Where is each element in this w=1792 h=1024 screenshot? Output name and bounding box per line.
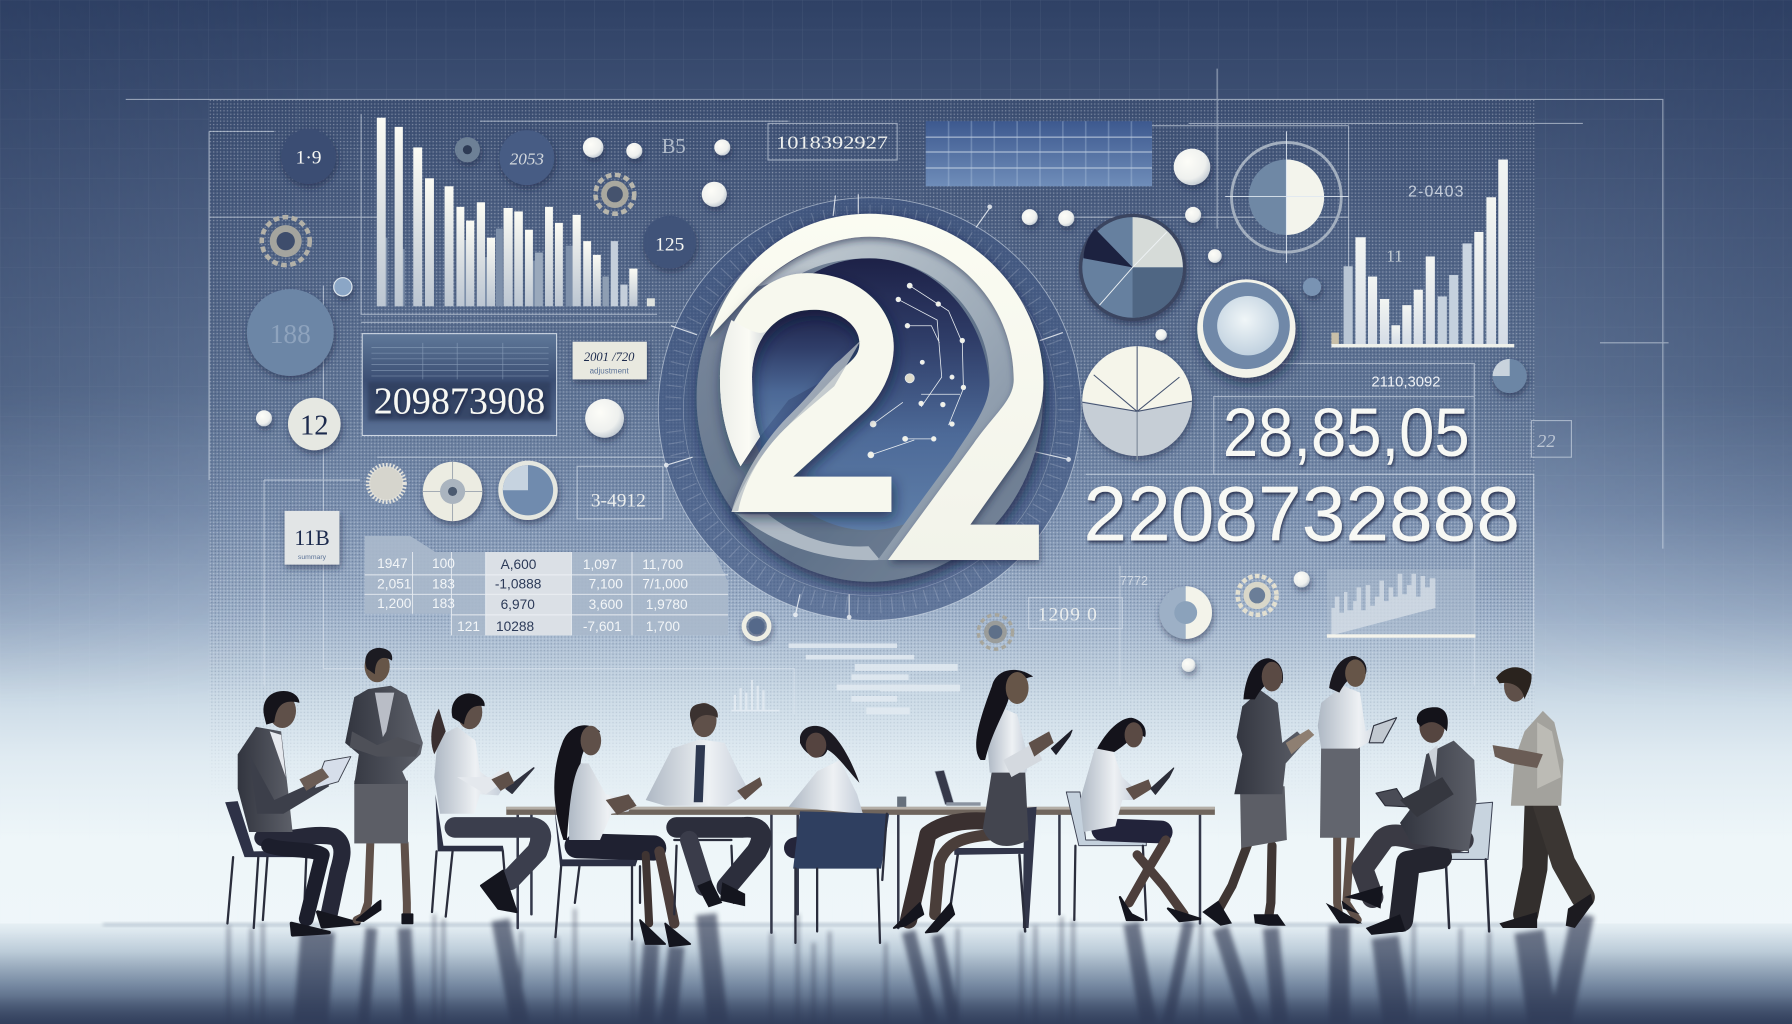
small decorative balls xyxy=(256,137,1310,672)
legs 1 xyxy=(263,835,342,914)
metric circle 2053 xyxy=(499,130,554,185)
tablet 1 xyxy=(314,757,351,789)
data table: 1947 xyxy=(377,556,408,571)
data table: 1,700 xyxy=(646,619,680,634)
number 209873908: 209873908 xyxy=(374,381,545,423)
dome button xyxy=(1197,279,1296,378)
data table: 100 xyxy=(432,556,455,571)
solar-style data panel xyxy=(926,121,1152,186)
person 1 seated man xyxy=(225,691,359,935)
person 5 man at table xyxy=(646,703,762,914)
big numeral 22 emblem xyxy=(697,214,1043,582)
metric circle 1.9: 1·9 xyxy=(296,147,322,168)
note card: adjustment xyxy=(590,367,629,376)
data table: 2,051 xyxy=(377,577,411,592)
outer numeral 2 inner band xyxy=(757,234,1014,560)
team of people with tablets xyxy=(225,648,1593,946)
floor horizon shadow xyxy=(103,922,1566,927)
chair 4 xyxy=(554,807,640,939)
data table: 6,970 xyxy=(501,597,535,612)
small ring xyxy=(744,614,769,639)
person 8 seated woman xyxy=(1066,718,1200,921)
donut chart xyxy=(1159,586,1212,639)
data table: 1,9780 xyxy=(646,597,688,612)
lower stacked bars xyxy=(789,643,960,714)
gear round xyxy=(368,465,405,502)
note card xyxy=(573,342,647,379)
data table: 7/1,000 xyxy=(642,577,688,592)
person 2 standing woman xyxy=(345,648,423,923)
dial pointers xyxy=(664,194,1070,619)
pie chart dark xyxy=(1079,214,1186,321)
data table: 183 xyxy=(432,577,455,592)
label 3-4912: 3-4912 xyxy=(591,490,646,511)
small pie right xyxy=(1493,359,1527,393)
person 3 seated man xyxy=(431,693,541,917)
laptop and cup xyxy=(897,770,981,807)
chair 1 xyxy=(225,801,309,928)
gray outer ring xyxy=(697,214,1043,582)
label 2110,3092: 2110,3092 xyxy=(1371,374,1441,390)
constellation network xyxy=(868,283,966,458)
ringed half pie xyxy=(1225,131,1349,263)
guide lines xyxy=(126,69,1669,714)
chair 3 xyxy=(432,794,505,917)
gear top xyxy=(595,175,634,214)
metric circle 1.9 xyxy=(281,129,336,184)
data table: -7,601 xyxy=(583,619,622,634)
metric circle 125: 125 xyxy=(655,234,684,255)
metric circle 2053: 2053 xyxy=(510,150,544,169)
data table: 1,200 xyxy=(377,596,412,611)
faint label B5: B5 xyxy=(662,136,686,158)
person 9 standing woman xyxy=(1202,658,1314,926)
torso 1 xyxy=(238,727,293,832)
lower ring highlight xyxy=(737,514,880,560)
small blue dots xyxy=(334,137,1321,296)
metric circle 125 xyxy=(643,216,696,269)
dotted data panel xyxy=(209,99,1535,797)
bar chart right xyxy=(1331,160,1514,347)
edge vignette xyxy=(0,30,1792,651)
data table: 3,600 xyxy=(589,597,623,612)
data table: 183 xyxy=(432,596,455,611)
note card: 2001 /720 xyxy=(584,350,635,364)
front numeral 2 xyxy=(720,273,894,512)
conference table xyxy=(506,807,1215,933)
metric circle 12: 12 xyxy=(300,410,329,441)
chair 8 xyxy=(1066,792,1146,920)
outer numeral 2 face xyxy=(710,214,1043,560)
data table: 10288 xyxy=(496,619,534,634)
data table: 121 xyxy=(457,619,480,634)
person 7 woman at laptop xyxy=(894,670,1072,933)
faint label 11: 11 xyxy=(1386,247,1403,266)
person 6 woman leaning on table xyxy=(789,726,889,943)
data table: 1,097 xyxy=(583,557,617,572)
data table: 11,700 xyxy=(642,557,684,572)
gear lower center xyxy=(978,615,1013,649)
large pale metric circle xyxy=(247,289,334,376)
label card 11B: summary xyxy=(298,554,327,561)
pie chart cream xyxy=(1082,346,1192,461)
target disc xyxy=(423,462,482,521)
data table: -1,0888 xyxy=(495,577,542,592)
person 11 seated man xyxy=(1344,707,1493,935)
chair 5 xyxy=(674,840,734,914)
bar chart left xyxy=(377,118,655,306)
dark number box xyxy=(362,334,557,435)
inner hole xyxy=(747,258,990,530)
person 4 seated woman xyxy=(554,725,690,946)
large figure 28,85,05: 28,85,05 xyxy=(1223,394,1470,471)
head 1 xyxy=(269,694,296,728)
gear icons xyxy=(262,175,1277,649)
data table: 7,100 xyxy=(589,577,623,592)
chair 11 xyxy=(1410,802,1493,931)
faint label 22: 22 xyxy=(1537,431,1555,451)
label 1209 0: 1209 0 xyxy=(1038,605,1098,626)
faint label 7772: 7772 xyxy=(1120,574,1148,588)
top code label: 1018392927 xyxy=(776,133,888,153)
large figure 2208732888: 2208732888 xyxy=(1083,472,1520,558)
metric circle 12 xyxy=(288,398,341,450)
central dial xyxy=(658,194,1081,621)
floor fade xyxy=(0,931,1792,1024)
faint label 2-0403: 2-0403 xyxy=(1408,184,1465,201)
front numeral 2 shade band xyxy=(752,310,859,437)
data table xyxy=(365,536,728,635)
gear lower right xyxy=(1238,576,1277,615)
mini area chart xyxy=(1327,569,1475,638)
data table: A,600 xyxy=(501,557,537,572)
chair 7 xyxy=(949,807,1037,931)
gear left xyxy=(262,217,310,265)
large pale metric circle: 188 xyxy=(270,319,311,349)
pie small left xyxy=(498,461,558,520)
front numeral shading xyxy=(720,320,768,466)
faint mini chart xyxy=(731,680,779,711)
person 12 walking man xyxy=(1493,667,1593,928)
label card 11B xyxy=(285,511,339,565)
label card 11B: 11B xyxy=(294,526,330,550)
person 10 standing woman xyxy=(1318,656,1397,923)
people reflection xyxy=(229,909,1583,1024)
floor xyxy=(0,923,1792,1024)
